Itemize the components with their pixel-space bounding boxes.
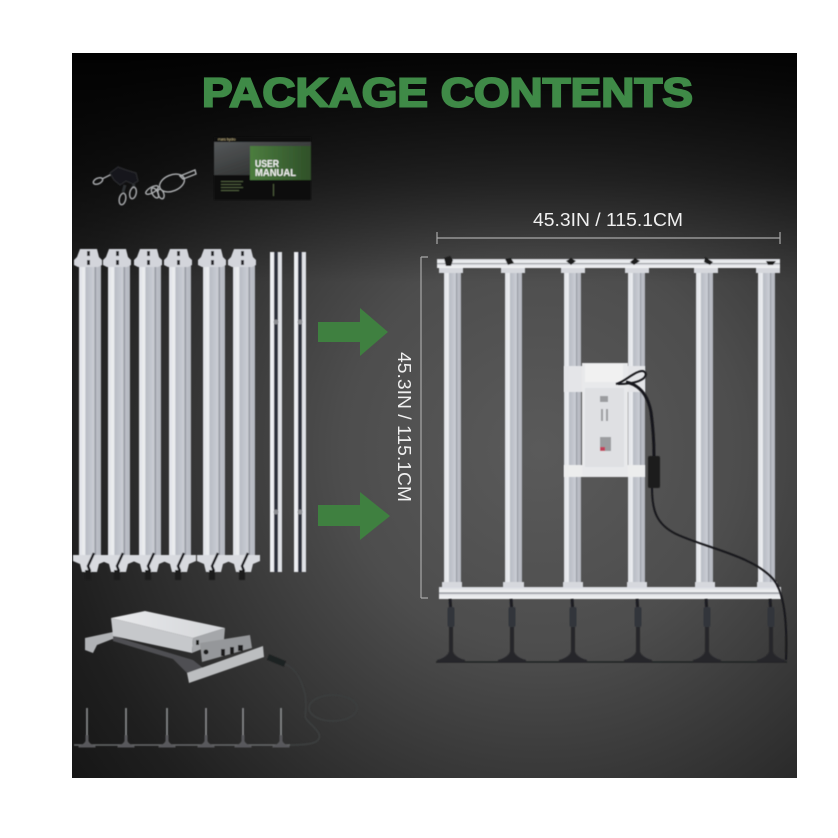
- upper bracket: [564, 366, 645, 392]
- mounting plate: [582, 363, 628, 477]
- waterproof connector: [648, 456, 660, 488]
- cord: [285, 664, 319, 745]
- driver body side: [111, 618, 193, 653]
- height dimension line: [421, 257, 428, 598]
- connector 4: [198, 708, 214, 748]
- assembled bar 3: [564, 266, 581, 589]
- assembled bar 4: [628, 266, 645, 589]
- title: PACKAGE CONTENTS: [202, 70, 693, 116]
- manual green block: [250, 146, 311, 180]
- bar 5: [197, 249, 230, 580]
- arrow: upper green: [318, 308, 388, 356]
- rail 1: [270, 252, 282, 572]
- bottom rail: [439, 587, 781, 599]
- assembled light fixture: [437, 256, 781, 599]
- driver body: [585, 388, 624, 467]
- LED light bars, disassembled: [73, 249, 260, 580]
- bar 3: [133, 249, 166, 580]
- driver left bracket: [85, 632, 115, 653]
- drop 5: [693, 599, 721, 662]
- power driver with brackets: [85, 611, 264, 683]
- icon: rope hangers: [92, 167, 138, 205]
- connector 1: [78, 708, 96, 748]
- drop 3: [559, 599, 587, 662]
- width dimension line: [437, 232, 780, 244]
- lower bracket: [564, 465, 645, 477]
- dark gradient background panel: [72, 53, 797, 778]
- driver body end: [192, 628, 225, 653]
- drop 1: [437, 599, 465, 662]
- power cord and coil: [268, 657, 357, 745]
- assembled bar 6: [758, 266, 775, 589]
- bottom rail caps: [442, 582, 777, 588]
- assembled bar 5: [696, 266, 713, 589]
- arrow: lower green: [318, 492, 390, 540]
- connector 6: [272, 708, 290, 748]
- icon: steel wire hanger: [145, 170, 196, 200]
- bar 6: [227, 249, 260, 580]
- driver body top: [111, 611, 225, 638]
- manual heading: USER: [255, 158, 279, 170]
- top rail caps: [439, 266, 780, 273]
- rail 2: [294, 252, 306, 572]
- trunk line: [436, 661, 787, 663]
- main power cable: [616, 371, 786, 660]
- height label: 45.3IN / 115.1CM: [394, 352, 414, 502]
- connector 5: [234, 708, 252, 748]
- wiring harness with six T connectors: [74, 708, 290, 748]
- cross rails, disassembled: [270, 252, 306, 572]
- plug: [268, 657, 285, 664]
- drop 6: [757, 599, 785, 662]
- bar 1: [73, 249, 106, 580]
- connector 3: [158, 708, 176, 748]
- driver mounted on fixture: [564, 363, 645, 477]
- width label: 45.3IN / 115.1CM: [533, 210, 683, 230]
- driver right bracket: [187, 646, 264, 683]
- driver end sockets: [196, 640, 243, 656]
- assembled bar 1: [444, 266, 461, 589]
- fixture wiring harness: [436, 599, 787, 662]
- manual photo band: [214, 142, 311, 175]
- assembled bar 2: [505, 266, 522, 589]
- bar 4: [163, 249, 196, 580]
- upper cable: [626, 382, 654, 456]
- manual fine print: [221, 181, 274, 196]
- user manual booklet: [214, 137, 311, 200]
- coil: [309, 695, 357, 721]
- driver label marks: [600, 396, 611, 451]
- drop 4: [624, 599, 652, 662]
- driver mount rail: [113, 636, 203, 673]
- bar 2: [102, 249, 135, 580]
- lower cable: [652, 488, 786, 660]
- cable loop: [616, 371, 646, 384]
- driver red logo: [600, 447, 605, 451]
- top rail clips: [444, 256, 776, 266]
- harness trunk: [74, 744, 290, 746]
- connector 2: [118, 708, 134, 748]
- top rail: [437, 259, 780, 268]
- drop 2: [498, 599, 526, 662]
- junction box: [585, 364, 623, 382]
- manual heading: MANUAL: [255, 167, 297, 179]
- manual brand text: mars hydro: [218, 138, 236, 142]
- driver end plate: [200, 635, 252, 662]
